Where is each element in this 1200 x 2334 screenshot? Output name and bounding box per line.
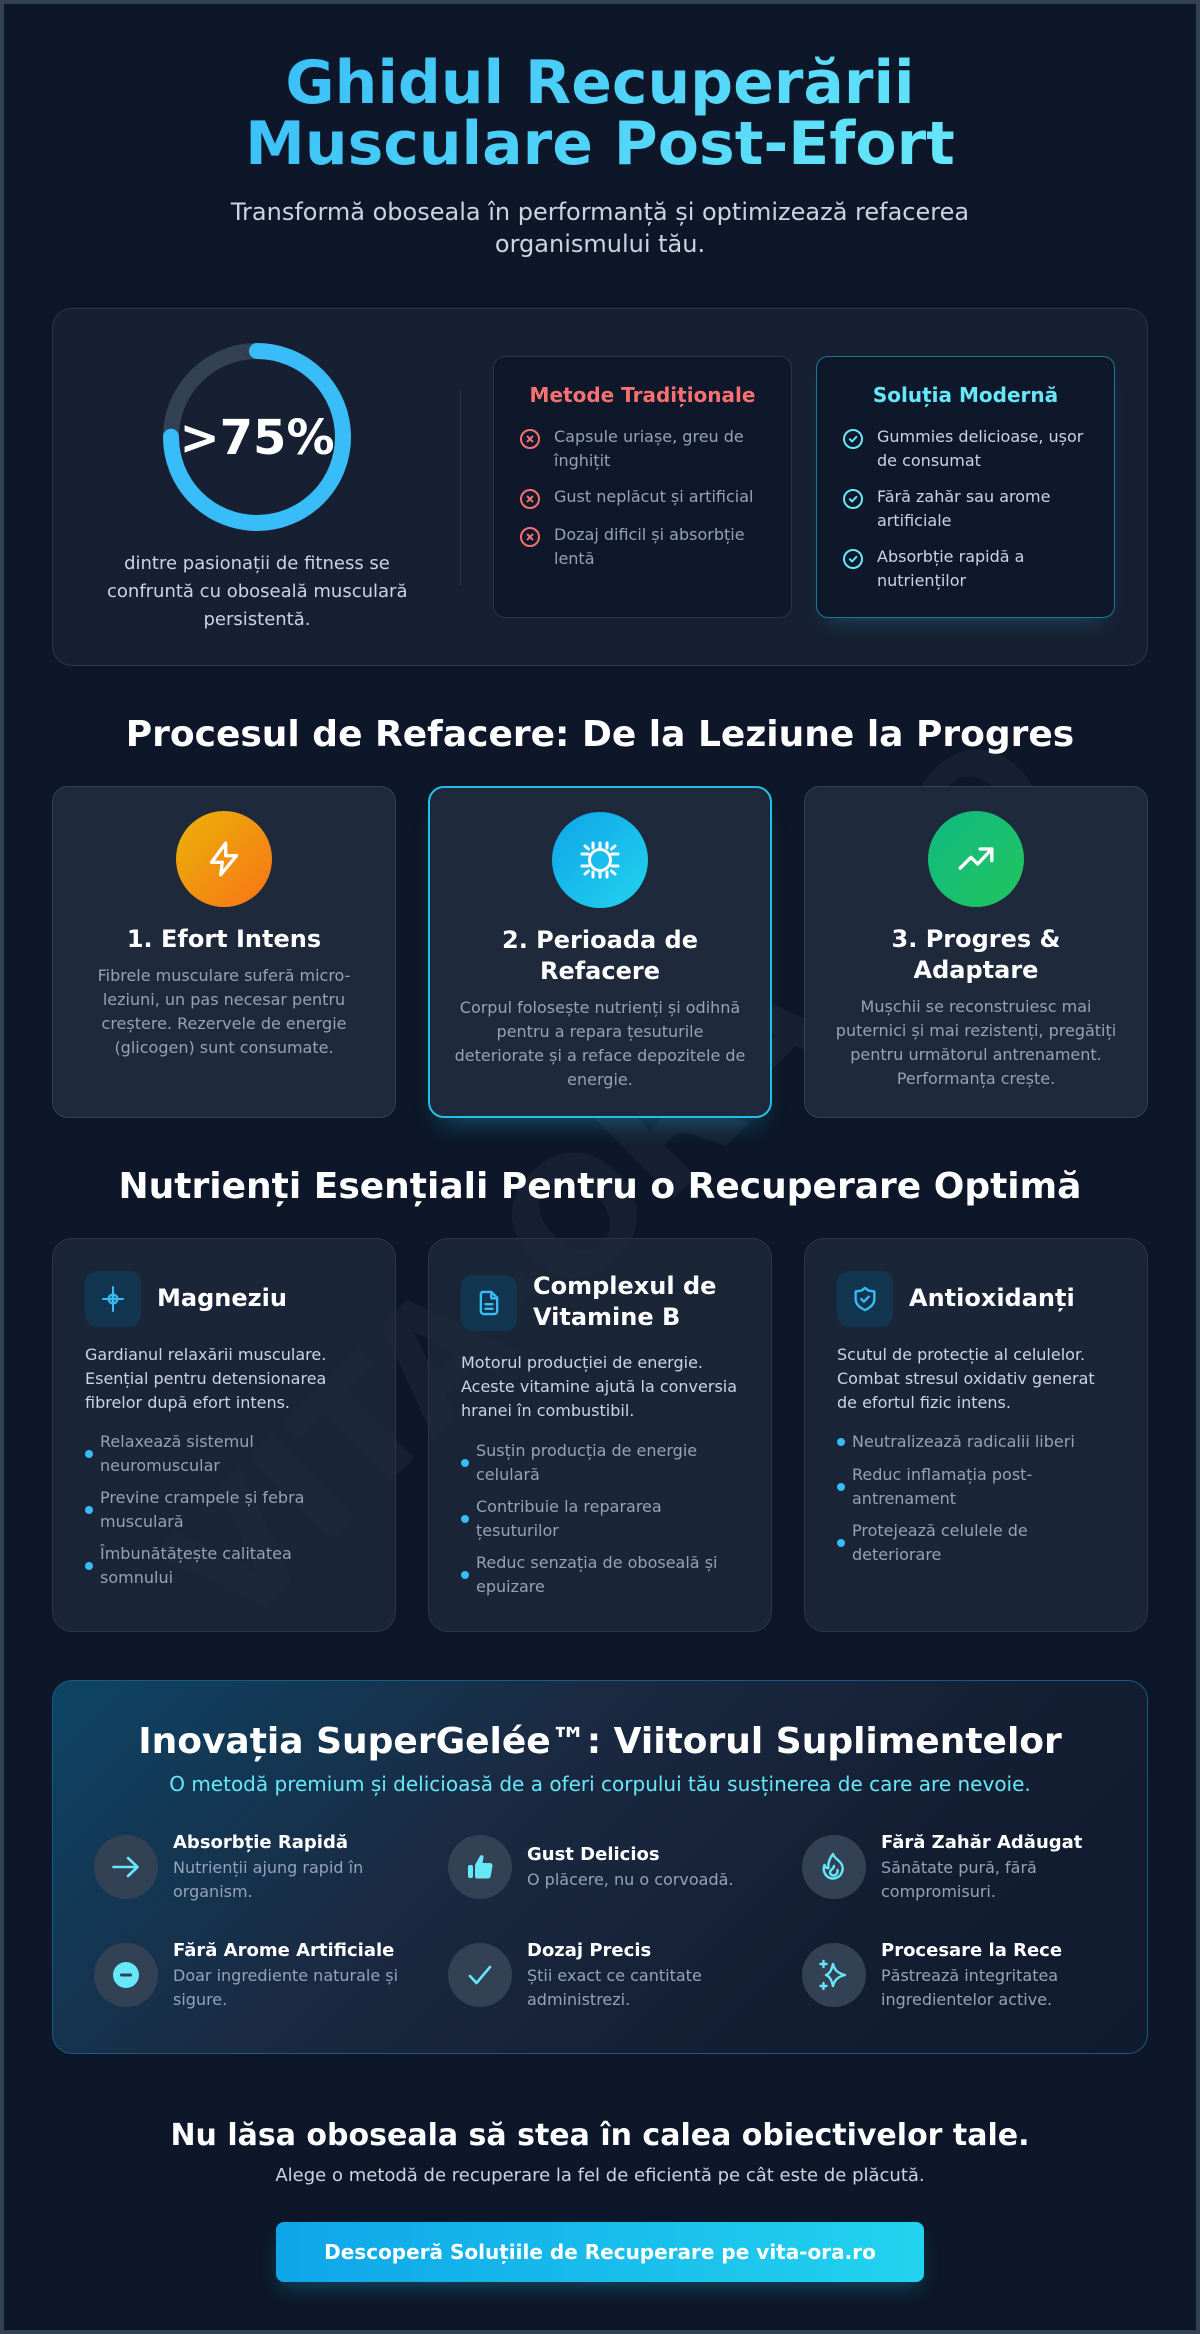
panel: step 2 [428, 786, 772, 1118]
benefit: Relaxează sistemul [100, 1432, 254, 1451]
feature: cold processing: Păstrează integritatea [881, 1966, 1058, 1985]
feature: cold processing: ingredientelor active. [881, 1990, 1052, 2009]
step text: Fibrele musculare suferă micro- [98, 966, 350, 985]
feature: taste: Gust Delicios [527, 1844, 660, 1865]
text: Capsule uriașe, greu de [554, 427, 744, 446]
step title: 2. Perioada de [502, 926, 698, 954]
benefit: epuizare [476, 1577, 545, 1596]
benefit: Protejează celulele de [852, 1521, 1028, 1540]
benefit: Contribuie la repararea [476, 1497, 662, 1516]
innovation title: Inovația SuperGelée™: Viitorul Suplimentelor [138, 1721, 1062, 1762]
benefit: musculară [100, 1512, 184, 1531]
stat caption: persistentă. [203, 609, 310, 630]
step text: energie. [567, 1070, 633, 1089]
item [520, 489, 540, 509]
feature: absorption: Absorbție Rapidă [173, 1832, 348, 1852]
stat caption: dintre pasionații de fitness se [124, 553, 390, 574]
nutrient description: fibrelor după efort intens. [85, 1393, 290, 1412]
icon: check [448, 1943, 512, 2007]
feature: dosage: administrezi. [527, 1990, 630, 2009]
text: înghițit [554, 451, 610, 470]
benefit [461, 1553, 717, 1596]
nutrient title [533, 1272, 716, 1331]
icon: document [461, 1275, 517, 1331]
button: Descoperă Soluțiile de Recuperare pe vita-ora.ro [324, 2240, 876, 2264]
step title [502, 926, 698, 985]
panel: innovation [52, 1680, 1148, 2054]
title: Ghidul Recuperării [285, 48, 915, 118]
step title: Refacere [540, 957, 660, 985]
title: Musculare Post-Efort [245, 109, 955, 179]
step text: leziuni, un pas necesar pentru [103, 990, 345, 1009]
feature: cold processing [881, 1940, 1062, 2009]
benefit: antrenament [852, 1489, 956, 1508]
item [520, 527, 540, 547]
panel: hero statistics and comparison [52, 308, 1148, 666]
stat value: >75% [179, 410, 335, 466]
benefit [837, 1465, 1032, 1508]
step title: 1. Efort Intens [127, 925, 321, 953]
item [843, 549, 863, 569]
icon: sun [552, 812, 648, 908]
step text: creștere. Rezervele de energie [102, 1014, 346, 1033]
donut chart: 75% [163, 343, 351, 531]
subtitle: organismului tău. [495, 230, 705, 258]
benefit: Neutralizează radicalii liberi [852, 1432, 1075, 1451]
icon: lightning [176, 811, 272, 907]
step text: pentru următorul antrenament. [850, 1044, 1102, 1064]
icon: magnesium [85, 1271, 141, 1327]
item [520, 429, 540, 449]
nutrient description: Aceste vitamine ajută la conversia [461, 1377, 737, 1396]
nutrient title: Antioxidanți [909, 1284, 1075, 1312]
item [843, 489, 863, 509]
panel: step 3 [804, 786, 1148, 1118]
step text [455, 998, 745, 1089]
benefit [85, 1432, 254, 1475]
icon: thumbs up [448, 1835, 512, 1899]
feature: dosage: Știi exact ce cantitate [527, 1966, 702, 1985]
call to action heading: Nu lăsa oboseala să stea în calea obiectivelor tale. [170, 2118, 1030, 2153]
feature: taste: O plăcere, nu o corvoadă. [527, 1870, 733, 1889]
feature: no sugar [881, 1832, 1082, 1900]
benefit: celulară [476, 1465, 540, 1484]
nutrient title: Complexul de [533, 1272, 716, 1300]
benefit: Susțin producția de energie [476, 1441, 697, 1460]
heading: traditional: Metode Tradiționale [530, 383, 755, 407]
step text [98, 966, 350, 1057]
icon: trending up [928, 811, 1024, 907]
benefit: Reduc senzația de oboseală și [476, 1553, 717, 1572]
heading: nutrients: Nutrienți Esențiali Pentru o Recuperare Optimă [119, 1166, 1081, 1206]
text [554, 525, 745, 568]
nutrient description: Combat stresul oxidativ generat [837, 1369, 1095, 1388]
benefit: Reduc inflamația post- [852, 1465, 1032, 1484]
feature: no flavors [173, 1940, 398, 2009]
benefit [85, 1544, 292, 1587]
panel: modern solution [816, 356, 1115, 618]
nutrient description: Gardianul relaxării musculare. [85, 1345, 326, 1364]
step text: (glicogen) sunt consumate. [114, 1038, 334, 1057]
step text: Mușchii se reconstruiesc mai [861, 996, 1091, 1016]
benefit: Previne crampele și febra [100, 1488, 304, 1507]
panel: step 1 [52, 786, 396, 1118]
feature: no flavors: sigure. [173, 1990, 227, 2009]
text: Fără zahăr sau arome [877, 487, 1050, 506]
title [245, 48, 955, 179]
watermark: VITA-ORA.RO [130, 700, 1094, 1664]
feature: no flavors: Fără Arome Artificiale [173, 1940, 394, 1961]
text: de consumat [877, 451, 981, 470]
step text [836, 996, 1116, 1088]
feature: absorption [173, 1832, 363, 1900]
step title: Adaptare [914, 956, 1038, 984]
nutrient description: Scutul de protecție al celulelor. [837, 1345, 1085, 1364]
text: nutrienților [877, 571, 966, 590]
item [843, 429, 863, 449]
icon: shield [837, 1271, 893, 1327]
icon: minus circle [94, 1943, 158, 2007]
feature: no flavors: Doar ingrediente naturale și [173, 1966, 398, 1985]
step text: Performanța crește. [897, 1068, 1055, 1088]
feature: no sugar: Fără Zahăr Adăugat [881, 1832, 1082, 1852]
text: Gust neplăcut și artificial [554, 487, 753, 506]
icon: flame [802, 1835, 866, 1899]
icon: arrow [94, 1835, 158, 1899]
step text: pentru a repara țesuturile [497, 1022, 703, 1041]
button [276, 2222, 924, 2282]
stat caption [107, 553, 407, 630]
feature: absorption: Nutrienții ajung rapid în [173, 1858, 363, 1876]
nutrient title: Vitamine B [533, 1303, 680, 1331]
subtitle: Transformă oboseala în performanță și optimizează refacerea [231, 198, 969, 226]
text: artificiale [877, 511, 952, 530]
stat caption: confruntă cu oboseală musculară [107, 581, 407, 602]
benefit [461, 1441, 697, 1484]
nutrient description: de efortul fizic intens. [837, 1393, 1011, 1412]
feature: absorption: organism. [173, 1882, 253, 1900]
nutrient description: Esențial pentru detensionarea [85, 1369, 326, 1388]
step text: Corpul folosește nutrienți și odihnă [460, 998, 740, 1017]
text: Gummies delicioase, ușor [877, 427, 1083, 446]
icon: sparkles [802, 1943, 866, 2007]
benefit: Îmbunătățește calitatea [100, 1544, 292, 1563]
text [554, 427, 744, 470]
text: Absorbție rapidă a [877, 547, 1024, 566]
feature: no sugar: Sănătate pură, fără [881, 1858, 1037, 1876]
nutrient description: Motorul producției de energie. [461, 1353, 703, 1372]
benefit [461, 1497, 662, 1540]
text: lentă [554, 549, 595, 568]
step title [892, 925, 1060, 984]
benefit [85, 1488, 304, 1531]
panel: magnesium [52, 1238, 396, 1632]
feature: dosage [527, 1940, 702, 2009]
text: Dozaj dificil și absorbție [554, 525, 745, 544]
heading: modern: Soluția Modernă [873, 383, 1058, 407]
benefit [837, 1521, 1028, 1564]
benefit: somnului [100, 1568, 173, 1587]
nutrient description [85, 1345, 326, 1412]
divider [460, 390, 461, 585]
panel: antioxidants [804, 1238, 1148, 1632]
benefit: neuromuscular [100, 1456, 220, 1475]
nutrient description [461, 1353, 737, 1420]
nutrient description: hranei în combustibil. [461, 1401, 634, 1420]
benefit: deteriorare [852, 1545, 941, 1564]
feature: dosage: Dozaj Precis [527, 1940, 651, 1961]
panel: traditional methods [493, 356, 792, 618]
step text: puternici și mai rezistenți, pregătiți [836, 1020, 1116, 1040]
text [877, 547, 1024, 590]
heading: recovery process: Procesul de Refacere: De la Leziune la Progres [126, 714, 1074, 754]
panel: vitamin B [428, 1238, 772, 1632]
step text: deteriorate și a reface depozitele de [455, 1046, 745, 1065]
benefit: țesuturilor [476, 1521, 559, 1540]
feature: cold processing: Procesare la Rece [881, 1940, 1062, 1961]
text [877, 487, 1050, 530]
feature: no sugar: compromisuri. [881, 1882, 996, 1900]
nutrient description [837, 1345, 1095, 1412]
text [877, 427, 1084, 470]
nutrient title: Magneziu [157, 1284, 287, 1312]
call to action text: Alege o metodă de recuperare la fel de eficientă pe cât este de plăcută. [275, 2165, 925, 2186]
subtitle [230, 198, 969, 258]
feature: taste [527, 1844, 733, 1889]
step title: 3. Progres & [892, 925, 1060, 953]
innovation subtitle: O metodă premium și delicioasă de a oferi corpului tău susținerea de care are nevoie. [169, 1772, 1031, 1796]
